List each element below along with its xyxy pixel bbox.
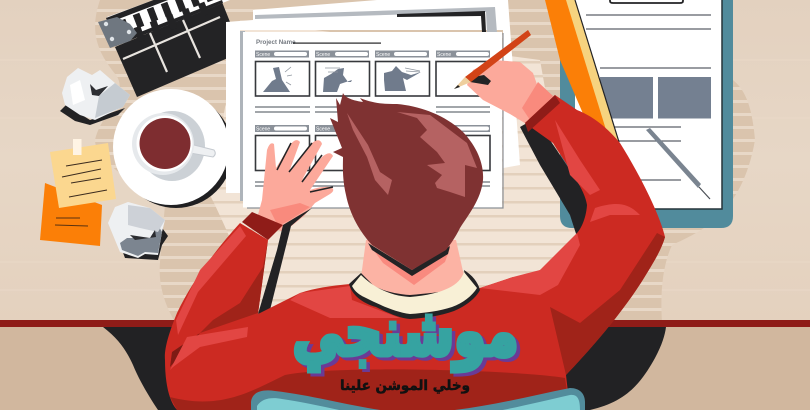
- clapper hinge: [98, 17, 137, 48]
- pencil: [454, 30, 531, 89]
- storyboard frames row 1: [256, 62, 490, 96]
- floor: [0, 327, 810, 410]
- desk edge: [0, 320, 810, 327]
- scene row 2: Scene: [437, 126, 451, 132]
- crumpled paper top: [60, 68, 130, 125]
- clapperboard: [98, 0, 242, 97]
- crumpled paper bottom: [108, 202, 168, 260]
- sticky note orange: [40, 183, 102, 246]
- ruler: [545, 0, 619, 143]
- project name: Project Name: [256, 39, 296, 46]
- desk background: [0, 0, 810, 322]
- scene row 2: [255, 125, 490, 132]
- collar: [349, 270, 480, 319]
- neck: [360, 240, 466, 302]
- logo wordmark: موشنجي: [292, 294, 518, 372]
- sticky note yellow: [50, 139, 116, 208]
- chair shadow: [103, 327, 666, 410]
- logo wordmark: موشنجي: [296, 297, 522, 375]
- desk wood blob: [95, 0, 755, 322]
- text rows: [255, 107, 490, 186]
- hair highlights: [347, 112, 477, 197]
- scene row 1: Scene: [256, 52, 270, 58]
- left hand: [256, 140, 333, 232]
- clipboard image blocks: [600, 77, 711, 118]
- tagline: وخلي الموشن علينا: [340, 378, 470, 394]
- right hand with pencil: [454, 30, 555, 125]
- scene row 1: Scene: [316, 52, 330, 58]
- coffee saucer: [113, 89, 233, 208]
- clipboard: [560, 0, 733, 228]
- right arm dark strip: [520, 123, 592, 240]
- chair backrest: [251, 388, 585, 410]
- left arm dark strip: [258, 208, 312, 314]
- scene row 1: Scene: [376, 52, 390, 58]
- scene row 2: Scene: [316, 126, 330, 132]
- paper stack: [226, 0, 520, 201]
- scene row 1: [255, 50, 490, 58]
- hair: [330, 93, 483, 276]
- scene row 2: Scene: [256, 126, 270, 132]
- storyboard sheet: [243, 32, 503, 208]
- pen: [646, 128, 710, 199]
- coffee cup: [132, 111, 215, 181]
- scene row 1: Scene: [437, 52, 451, 58]
- torso and arms: [165, 95, 665, 410]
- clipboard clip: [610, 0, 683, 3]
- storyboard frames row 2: [256, 136, 490, 170]
- sweater shadows: [170, 95, 665, 410]
- frame silhouettes: [263, 66, 421, 92]
- sweater highlights: [170, 120, 640, 370]
- project name: [256, 39, 381, 46]
- red sweater: [165, 95, 665, 410]
